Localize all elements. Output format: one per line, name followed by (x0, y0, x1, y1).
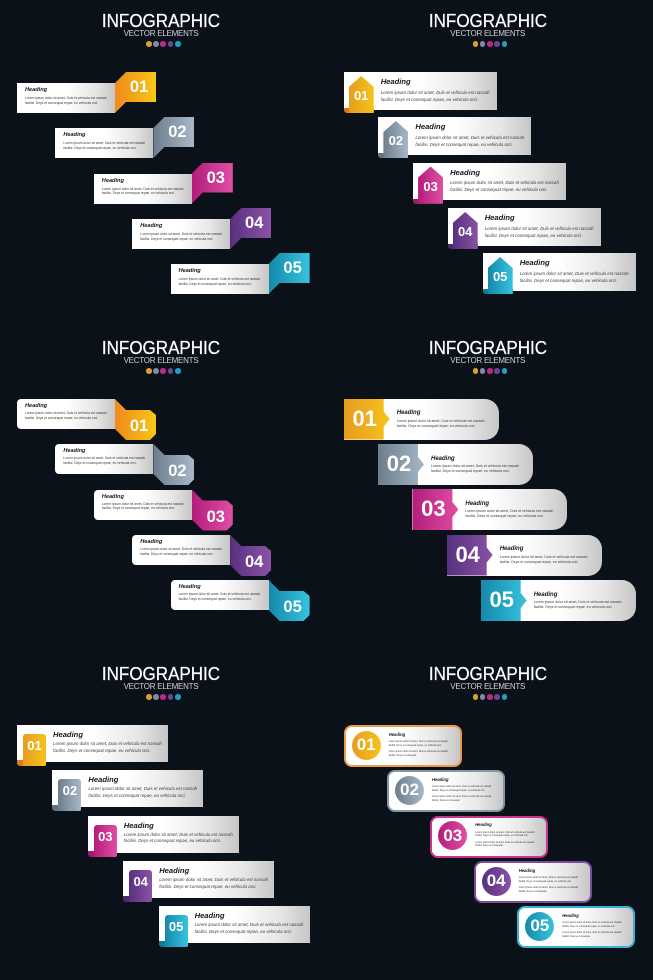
step 01: 01 (352, 406, 377, 430)
step 03: facilisi. Deys et consequat repae, eu vehicula orci. (102, 506, 175, 510)
title: VECTOR ELEMENTS (124, 682, 198, 691)
step 03 (413, 163, 566, 204)
step 04 (132, 208, 271, 249)
title: INFOGRAPHIC (429, 10, 547, 31)
step 01 (17, 399, 156, 440)
step 05 (171, 253, 310, 294)
title: INFOGRAPHIC (429, 337, 547, 358)
step 01: Lorem ipsum dolor sit amet, Duis et vehicula est nassah (381, 90, 490, 94)
step 03: Heading (450, 168, 480, 176)
step 03: 03 (207, 508, 225, 526)
step 05: 05 (489, 587, 514, 612)
step 04: Lorem ipsum dolor sit amet, Duis et vehicula est nassah (519, 886, 578, 889)
step 01 (344, 725, 462, 767)
step 03: 03 (443, 826, 462, 844)
title: INFOGRAPHIC (102, 337, 220, 358)
step 04: 04 (458, 224, 472, 239)
step 01: Lorem ipsum dolor sit amet, Duis et vehicula est nassah (25, 96, 107, 100)
step 02: 02 (389, 133, 403, 148)
step 05: Heading (562, 913, 579, 918)
step 03: Heading (465, 500, 489, 506)
panel: arrow number blocks (344, 337, 636, 621)
step 04: facilisi. Deys et consequat (519, 890, 546, 893)
step 02: 02 (400, 780, 419, 799)
step 05: Lorem ipsum dolor sit amet, Duis et vehicula est nassah (534, 600, 622, 604)
step 04: Heading (140, 223, 162, 229)
step 04 (448, 208, 601, 249)
step 03: facilisi. Deys et consequat (475, 844, 503, 847)
step 05: 05 (283, 598, 302, 616)
step 05: 05 (530, 916, 549, 935)
title: INFOGRAPHIC (102, 10, 220, 31)
step 03: Lorem ipsum dolor sit amet, Duis et vehicula est nassah (102, 186, 184, 190)
step 04: 04 (133, 874, 148, 889)
step 01: 01 (130, 417, 148, 435)
step 01: 01 (357, 735, 376, 754)
step 01: Heading (25, 87, 47, 93)
step 03: 03 (207, 168, 225, 186)
step 01 (17, 725, 168, 766)
step 05: facilisi. Deys et consequat repae, eu vehicula orci. (534, 605, 612, 609)
step 03: 03 (98, 828, 113, 844)
step 01: facilisi. Deys et consequat (389, 754, 416, 757)
step 05: Heading (534, 592, 557, 598)
step 02: facilisi. Deys et consequat repae, eu vehicula orci. (63, 461, 137, 465)
step 03: 03 (421, 496, 446, 521)
step 01: 01 (354, 88, 368, 103)
step 04: facilisi. Deys et consequat repae, eu vehicula orci. (159, 884, 257, 889)
step 02: Lorem ipsum dolor sit amet, Duis et vehicula est nassah (431, 464, 519, 468)
step 03 (412, 489, 567, 530)
step 05 (481, 580, 636, 621)
step 03 (88, 816, 239, 857)
step 03: Lorem ipsum dolor sit amet, Duis et vehicula est nassah (465, 509, 553, 513)
step 01: facilisi. Deys et consequat repae, eu vehicula orci. (381, 96, 478, 102)
step 05: 05 (493, 269, 507, 284)
step 01: facilisi. Deys et consequat repae, eu vehicula orci. (397, 424, 475, 428)
step 04: Heading (519, 868, 535, 873)
step 02: Lorem ipsum dolor sit amet, Duis et vehicula est nassah (88, 786, 197, 791)
step 04 (123, 861, 274, 902)
step 04: 04 (487, 871, 506, 890)
step 05: Heading (520, 258, 550, 267)
step 04: 04 (455, 542, 480, 566)
step 04: Lorem ipsum dolor sit amet, Duis et vehicula est nassah (140, 232, 222, 236)
step 01: 01 (27, 738, 42, 753)
step 01: Lorem ipsum dolor sit amet, Duis et vehicula est nassah (389, 750, 448, 753)
step 02 (378, 444, 533, 485)
step 04: facilisi. Deys et consequat repae, eu vehicula orci. (500, 560, 578, 564)
step 04: Lorem ipsum dolor sit amet, Duis et vehicula est nassah (485, 226, 594, 230)
title (102, 10, 220, 47)
step 03: facilisi. Deys et consequat repae, eu vehicula orci. (450, 187, 547, 192)
title: VECTOR ELEMENTS (450, 29, 525, 38)
step 03: Heading (475, 822, 492, 827)
step 05 (159, 906, 310, 947)
step 05: facilisi. Deys et consequat repae, eu vehicula orci. (179, 282, 252, 286)
panel: folded tabs (17, 10, 310, 294)
step 04: Lorem ipsum dolor sit amet, Duis et vehicula est nassah (500, 554, 588, 558)
step 05: Heading (179, 584, 201, 590)
step 01: facilisi. Deys et consequat repae, eu vehicula orci. (25, 416, 98, 420)
step 03: Lorem ipsum dolor sit amet, Duis et vehicula est nassah (475, 830, 535, 834)
step 02: Lorem ipsum dolor sit amet, Duis et vehicula est nassah (63, 456, 145, 460)
step 02: facilisi. Deys et consequat repae, eu vehicula orci. (63, 146, 137, 150)
step 02 (55, 444, 194, 485)
step 05: 05 (169, 919, 183, 934)
step 02: Heading (63, 132, 85, 138)
step 03: Heading (102, 178, 124, 184)
step 04 (447, 535, 602, 576)
step 01: Lorem ipsum dolor sit amet, Duis et vehicula est nassah (25, 411, 107, 415)
title: VECTOR ELEMENTS (124, 356, 198, 365)
step 01 (344, 72, 497, 113)
step 05: 05 (283, 259, 302, 277)
step 02: 02 (387, 451, 411, 476)
step 04: Heading (159, 866, 189, 875)
step 02: facilisi. Deys et consequat repae, eu vehicula orci. (432, 789, 485, 792)
step 04: facilisi. Deys et consequat repae, eu vehicula orci. (140, 552, 213, 556)
step 05: facilisi. Deys et consequat repae, eu vehicula orci. (562, 925, 615, 928)
step 02: Heading (431, 456, 455, 462)
step 01: Lorem ipsum dolor sit amet, Duis et vehicula est nassah (397, 418, 485, 422)
step 02: Heading (63, 448, 85, 454)
step 01 (344, 399, 499, 440)
step 02: 02 (168, 462, 187, 480)
step 02: 02 (168, 123, 187, 141)
step 04: Lorem ipsum dolor sit amet, Duis et vehicula est nassah (159, 877, 268, 882)
step 02: Heading (432, 777, 449, 782)
step 02: Lorem ipsum dolor sit amet, Duis et vehicula est nassah (432, 795, 491, 798)
panel: outlined cards with circles (344, 663, 635, 948)
step 04: Heading (500, 546, 523, 552)
panel: rounded folded tabs (17, 337, 310, 621)
step 02: facilisi. Deys et consequat repae, eu vehicula orci. (415, 142, 513, 146)
title (429, 337, 547, 374)
step 05 (171, 580, 310, 621)
step 02: Lorem ipsum dolor sit amet, Duis et vehicula est nassah (63, 141, 145, 145)
title: VECTOR ELEMENTS (450, 682, 525, 691)
step 02: facilisi. Deys et consequat repae, eu vehicula orci. (431, 469, 510, 473)
step 03: facilisi. Deys et consequat repae, eu vehicula orci. (465, 514, 544, 518)
step 04: Heading (140, 539, 162, 545)
step 03: Lorem ipsum dolor sit amet, Duis et vehicula est nassah (124, 832, 233, 836)
step 04 (474, 861, 592, 903)
step 04 (132, 535, 271, 576)
step 03: Lorem ipsum dolor sit amet, Duis et vehicula est nassah (475, 840, 535, 844)
step 03: Heading (102, 494, 124, 500)
step 04: 04 (245, 214, 263, 232)
step 03: facilisi. Deys et consequat repae, eu vehicula orci. (102, 191, 175, 195)
step 01: facilisi. Deys et consequat repae, eu vehicula orci. (53, 748, 150, 753)
step 01: Lorem ipsum dolor sit amet, Duis et vehicula est nassah (389, 740, 448, 743)
step 05: facilisi. Deys et consequat (562, 935, 590, 938)
step 01: Heading (53, 730, 83, 739)
step 01: Lorem ipsum dolor sit amet, Duis et vehicula est nassah (53, 741, 162, 746)
step 03 (430, 816, 548, 858)
step 05: Lorem ipsum dolor sit amet, Duis et vehicula est nassah (195, 922, 303, 927)
step 01: Heading (397, 410, 420, 416)
step 04: Lorem ipsum dolor sit amet, Duis et vehicula est nassah (140, 547, 222, 551)
step 02 (387, 770, 505, 812)
step 04: Lorem ipsum dolor sit amet, Duis et vehicula est nassah (519, 876, 578, 879)
step 03 (94, 163, 233, 204)
step 05: Lorem ipsum dolor sit amet, Duis et vehicula est nassah (179, 277, 260, 281)
step 03 (94, 490, 233, 530)
step 01: facilisi. Deys et consequat repae, eu vehicula orci. (389, 744, 442, 747)
step 02: 02 (63, 783, 77, 798)
step 04: facilisi. Deys et consequat repae, eu vehicula orci. (519, 880, 572, 883)
step 05: facilisi. Deys et consequat repae, eu vehicula orci. (195, 929, 292, 934)
panel: square badges (17, 663, 310, 947)
step 02: Lorem ipsum dolor sit amet, Duis et vehicula est nassah (415, 134, 524, 140)
step 05: Lorem ipsum dolor sit amet, Duis et vehicula est nassah (179, 592, 260, 596)
step 03: 03 (423, 178, 438, 194)
title: VECTOR ELEMENTS (124, 29, 198, 38)
step 05: Heading (179, 268, 201, 274)
title (429, 663, 547, 700)
step 04: 04 (245, 553, 263, 571)
step 05: Heading (195, 911, 225, 920)
title: INFOGRAPHIC (102, 663, 220, 684)
step 05 (483, 253, 636, 294)
step 03: facilisi. Deys et consequat repae, eu vehicula orci. (475, 834, 528, 837)
title: VECTOR ELEMENTS (450, 356, 525, 365)
step 01: Heading (381, 77, 411, 86)
step 05: Lorem ipsum dolor sit amet, Duis et vehicula est nassah (562, 931, 622, 934)
step 05: facilisi. Deys et consequat repae, eu vehicula orci. (520, 278, 617, 282)
step 03: facilisi. Deys et consequat repae, eu vehicula orci. (124, 838, 221, 843)
step 02 (378, 117, 531, 158)
step 05: Lorem ipsum dolor sit amet, Duis et vehicula est nassah (520, 270, 629, 276)
step 03: Lorem ipsum dolor sit amet, Duis et vehicula est nassah (450, 180, 559, 185)
step 02: Heading (415, 122, 445, 131)
step 01: 01 (130, 78, 148, 96)
step 03: Lorem ipsum dolor sit amet, Duis et vehicula est nassah (102, 502, 184, 506)
step 05 (517, 906, 635, 948)
step 01: Heading (389, 732, 405, 737)
step 01: Heading (25, 403, 47, 409)
step 03: Heading (124, 820, 154, 830)
title (429, 10, 547, 47)
title (102, 663, 220, 700)
step 02 (55, 117, 194, 158)
panel: house badges (344, 10, 636, 294)
step 01 (17, 72, 156, 113)
step 05: Lorem ipsum dolor sit amet, Duis et vehicula est nassah (562, 921, 622, 924)
step 04: facilisi. Deys et consequat repae, eu vehicula orci. (485, 232, 582, 238)
step 04: facilisi. Deys et consequat repae, eu vehicula orci. (140, 237, 213, 241)
step 01: facilisi. Deys et consequat repae, eu vehicula orci. (25, 101, 98, 105)
step 04: Heading (485, 213, 515, 222)
step 02: Lorem ipsum dolor sit amet, Duis et vehicula est nassah (432, 785, 491, 788)
title (102, 337, 220, 374)
title: INFOGRAPHIC (429, 663, 547, 684)
step 02: Heading (88, 775, 118, 784)
step 02: facilisi. Deys et consequat repae, eu vehicula orci. (88, 793, 186, 798)
step 02 (52, 770, 203, 811)
step 05: facilisi. Deys et consequat repae, eu vehicula orci. (179, 597, 252, 601)
step 02: facilisi. Deys et consequat (432, 799, 460, 802)
